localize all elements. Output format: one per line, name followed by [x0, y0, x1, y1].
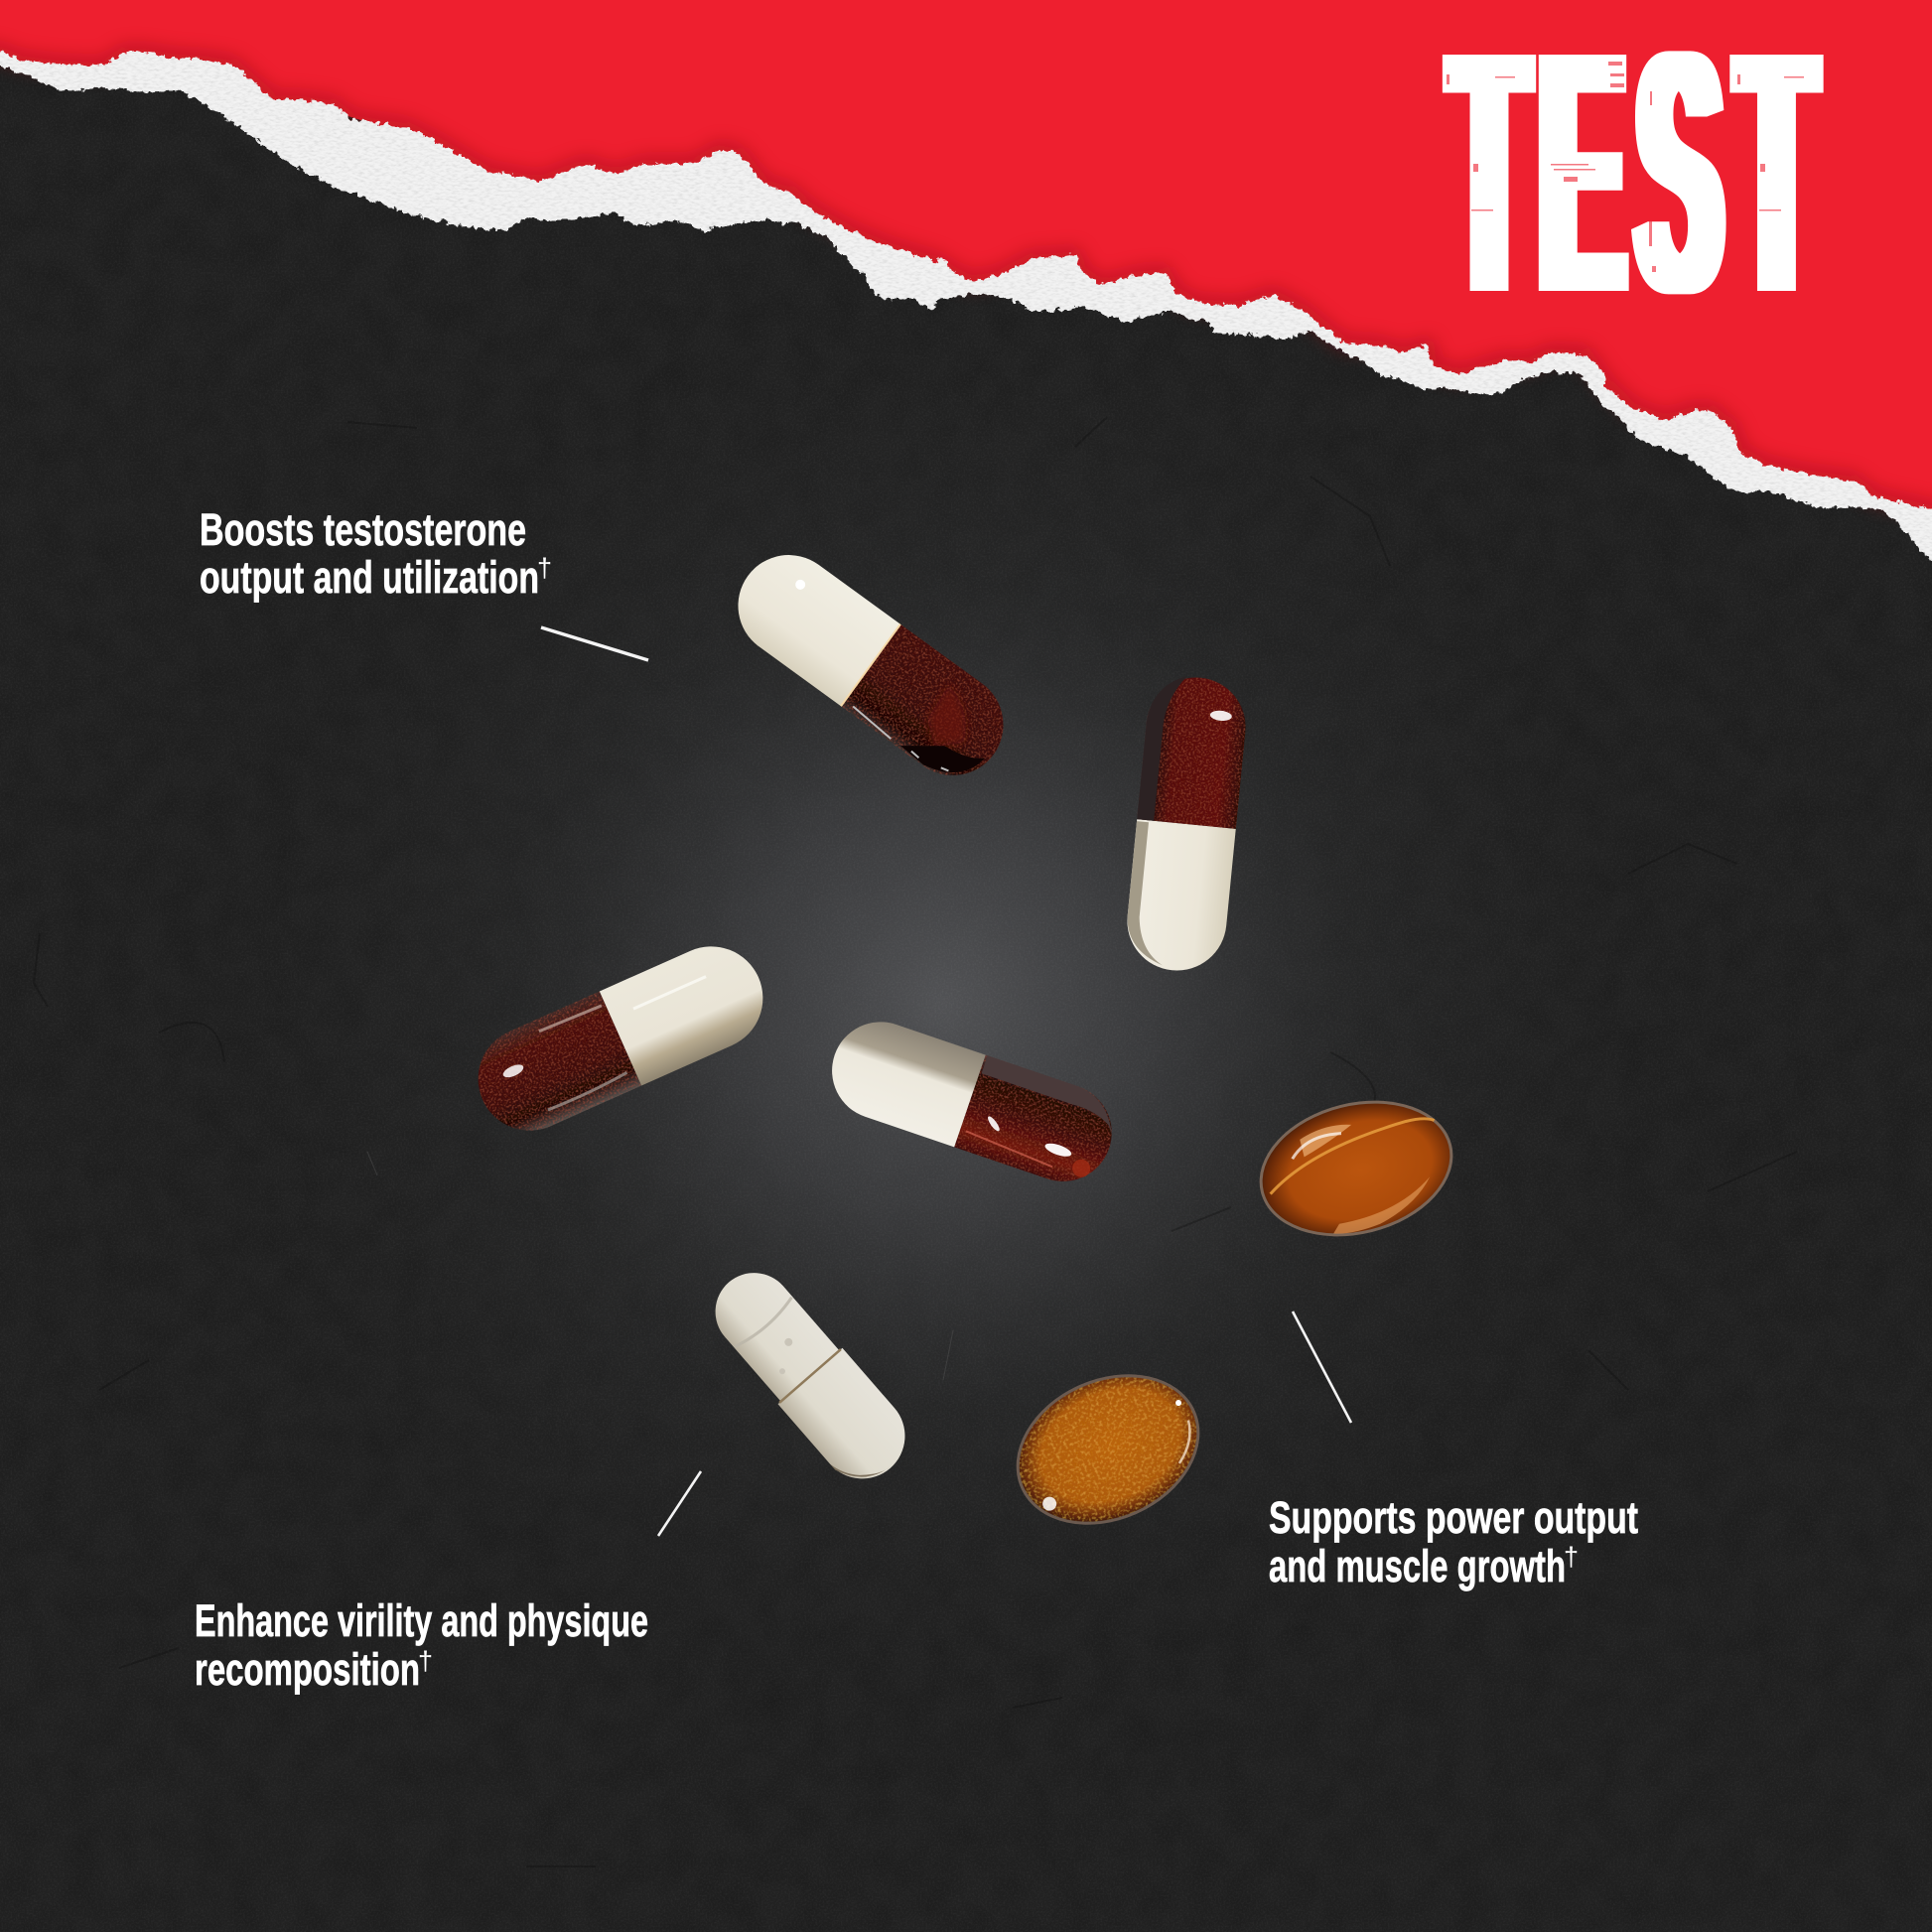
red torn header [0, 0, 1932, 521]
callout text: Boosts testosterone output and utilization [200, 504, 552, 603]
capsule 5: all-white [697, 1254, 922, 1496]
pointer line 1 [541, 627, 648, 660]
callout text: Supports power output and muscle growth [1269, 1492, 1638, 1591]
callout: virility [195, 1595, 648, 1695]
callout text: Enhance virility and physique recomposition: Enhance virility and physique [195, 1595, 648, 1646]
softgel 2: lower amber [992, 1346, 1224, 1553]
capsule 4: centre cream and maroon [819, 1009, 1125, 1194]
callout text: Supports power output and muscle growth: Supports power output [1269, 1492, 1638, 1543]
callout: testosterone [200, 504, 552, 603]
capsule 1: top left cream and maroon [718, 535, 1024, 795]
callout text: Boosts testosterone output and utilization: † [537, 553, 552, 583]
torn white paper edge [0, 50, 1932, 574]
pointer line 2 [658, 1471, 701, 1536]
callout text: Supports power output and muscle growth: † [1564, 1542, 1579, 1572]
callout text: Enhance virility and physique recomposition: † [418, 1646, 433, 1676]
capsule 2: top right maroon and cream [1123, 673, 1250, 975]
callout text: Supports power output and muscle growth: and muscle growth [1269, 1541, 1566, 1591]
capsule 3: left maroon and cream [462, 930, 779, 1147]
callout: power output [1269, 1492, 1638, 1591]
callout text: Enhance virility and physique recomposition [195, 1595, 648, 1695]
callout text: Boosts testosterone output and utilization: output and utilization [200, 552, 539, 603]
pointer line 3 [1293, 1311, 1351, 1423]
callout text: Enhance virility and physique recomposition: recomposition [195, 1644, 420, 1695]
callout text: Boosts testosterone output and utilization: Boosts testosterone [200, 504, 526, 555]
softgel 1: upper right amber [1245, 1081, 1467, 1256]
